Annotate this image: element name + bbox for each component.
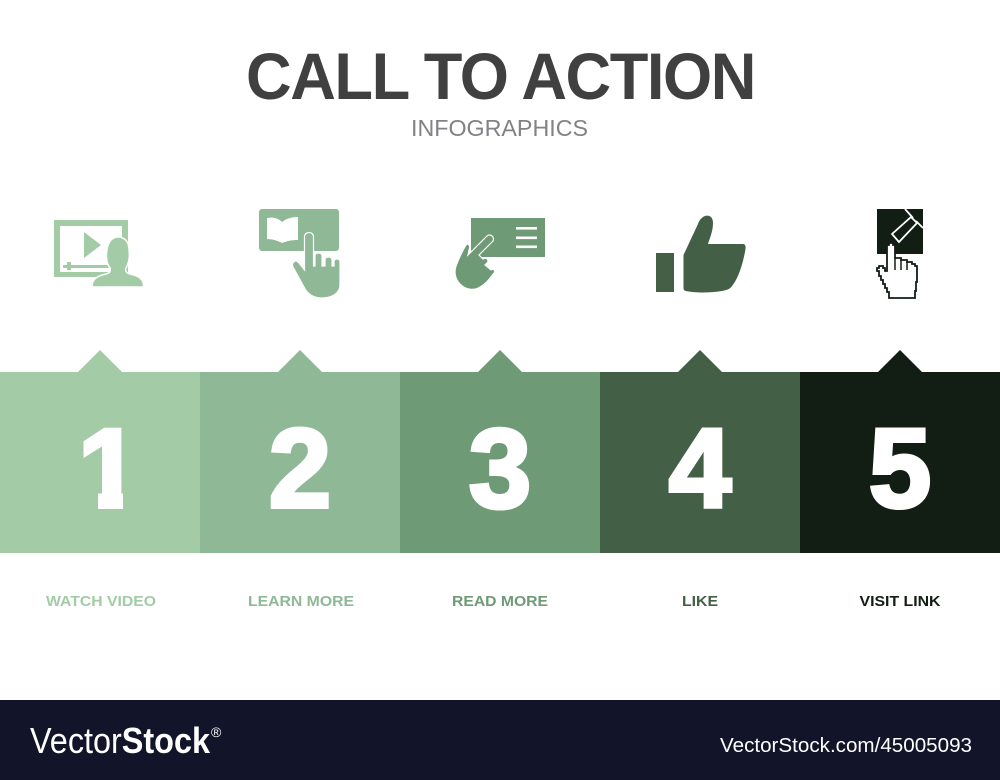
icon: learn more — [259, 209, 340, 298]
icon: watch video — [54, 220, 144, 287]
footer band — [0, 700, 1000, 780]
panel: step 3 — [400, 350, 600, 553]
number 4: 4 — [669, 406, 731, 531]
number 5: 5 — [869, 406, 931, 531]
label: watch video: WATCH VIDEO — [46, 594, 156, 610]
number 1: 1 — [78, 406, 140, 531]
icon: read more — [455, 218, 545, 289]
label: visit link: VISIT LINK — [860, 594, 941, 610]
label: like: LIKE — [682, 594, 718, 610]
panel: step 5 — [800, 350, 1000, 553]
number 3: 3 — [469, 406, 531, 531]
subtitle: INFOGRAPHICS — [411, 115, 588, 141]
panel: step 1 — [0, 350, 200, 553]
number 2: 2 — [269, 406, 331, 531]
footer url: VectorStock.com/45005093 — [720, 735, 972, 757]
title: CALL TO ACTION — [246, 39, 755, 113]
label: learn more: LEARN MORE — [248, 594, 354, 610]
registered mark: ® — [211, 724, 222, 740]
icon: like — [656, 216, 746, 292]
panel: step 2 — [200, 350, 400, 553]
icon: visit link — [877, 209, 923, 298]
footer logo: VectorStock — [30, 720, 211, 761]
label: read more: READ MORE — [452, 594, 548, 610]
panel: step 4 — [600, 350, 800, 553]
